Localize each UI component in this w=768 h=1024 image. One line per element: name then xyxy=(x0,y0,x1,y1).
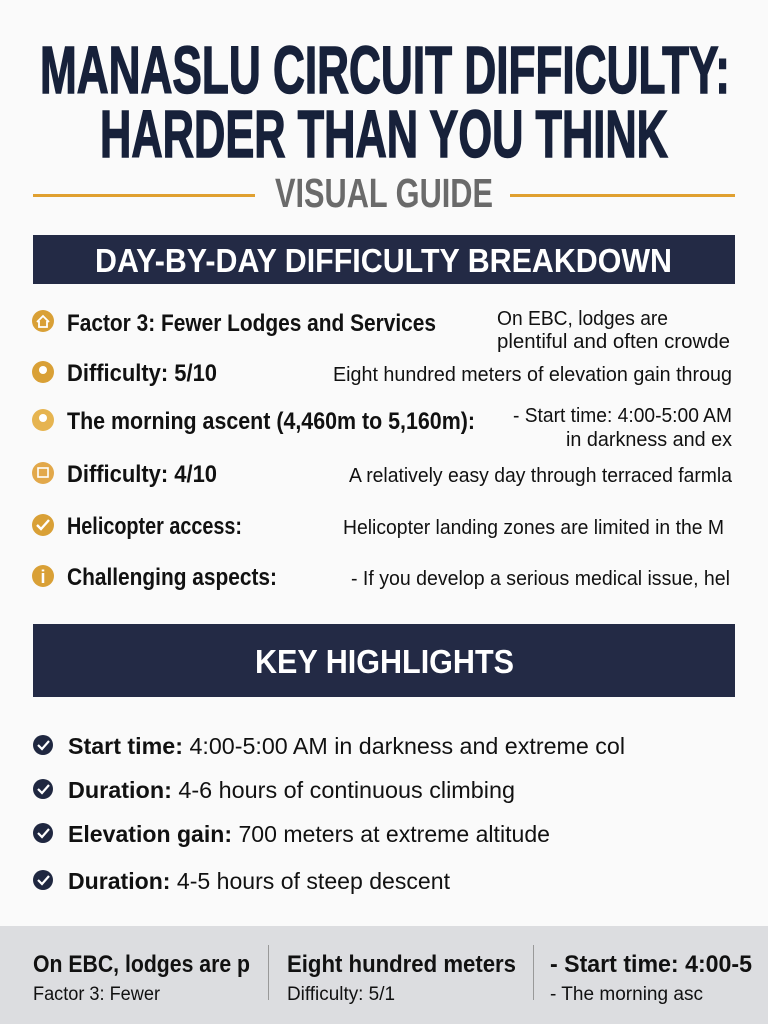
footer strip xyxy=(0,926,768,1024)
footer column 2: Eight hundred meters xyxy=(287,951,516,978)
row 5 xyxy=(32,513,724,540)
highlight 2: Duration: 4-6 hours of continuous climbing xyxy=(68,777,515,803)
row 2: Eight hundred meters of elevation gain throug xyxy=(333,364,732,386)
row 6: - If you develop a serious medical issue, hel xyxy=(351,568,730,590)
row 1: plentiful and often crowde xyxy=(497,331,730,353)
panel: highlights list xyxy=(33,733,625,894)
row 6: Challenging aspects: xyxy=(67,564,277,591)
section header: day-by-day: DAY-BY-DAY DIFFICULTY BREAKDOWN xyxy=(95,242,672,279)
section header: key highlights: KEY HIGHLIGHTS xyxy=(255,643,514,680)
highlight 4: Duration: 4-5 hours of steep descent xyxy=(68,868,451,894)
row 1 xyxy=(32,308,730,353)
subtitle: visual guide xyxy=(33,170,735,216)
row 3: The morning ascent (4,460m to 5,160m): xyxy=(67,408,475,435)
row 2: Difficulty: 5/10 xyxy=(67,360,217,387)
row 5: Helicopter landing zones are limited in the M xyxy=(343,517,724,539)
section header: key highlights xyxy=(33,624,735,697)
footer column 3: - The morning asc xyxy=(550,984,703,1005)
row 6: i xyxy=(40,567,46,587)
row 5: Helicopter access: xyxy=(67,513,242,540)
row 6 xyxy=(32,564,730,591)
row 4: A relatively easy day through terraced farmla xyxy=(349,465,733,487)
row 1: Factor 3: Fewer Lodges and Services xyxy=(67,310,436,337)
footer column 3 xyxy=(550,951,752,1005)
footer column 1: Factor 3: Fewer xyxy=(33,984,161,1005)
footer column 1 xyxy=(33,951,250,1005)
row 3 xyxy=(32,405,732,451)
subtitle: visual guide: VISUAL GUIDE xyxy=(275,170,493,216)
section header: day-by-day xyxy=(33,235,735,284)
row 3: - Start time: 4:00-5:00 AM xyxy=(513,405,732,427)
highlight 3: Elevation gain: 700 meters at extreme altitude xyxy=(68,821,550,847)
row 3: in darkness and ex xyxy=(566,429,732,451)
panel: breakdown rows xyxy=(32,308,733,591)
footer column 2 xyxy=(287,951,516,1005)
footer column 2: Difficulty: 5/1 xyxy=(287,984,395,1005)
highlight 1: Start time: 4:00-5:00 AM in darkness and extreme col xyxy=(68,733,625,759)
row 4 xyxy=(32,461,733,488)
row 4: Difficulty: 4/10 xyxy=(67,461,217,488)
title xyxy=(40,33,730,172)
row 1: On EBC, lodges are xyxy=(497,308,668,330)
footer column 3: - Start time: 4:00-5 xyxy=(550,951,752,978)
footer column 1: On EBC, lodges are p xyxy=(33,951,250,978)
row 2 xyxy=(32,360,732,387)
